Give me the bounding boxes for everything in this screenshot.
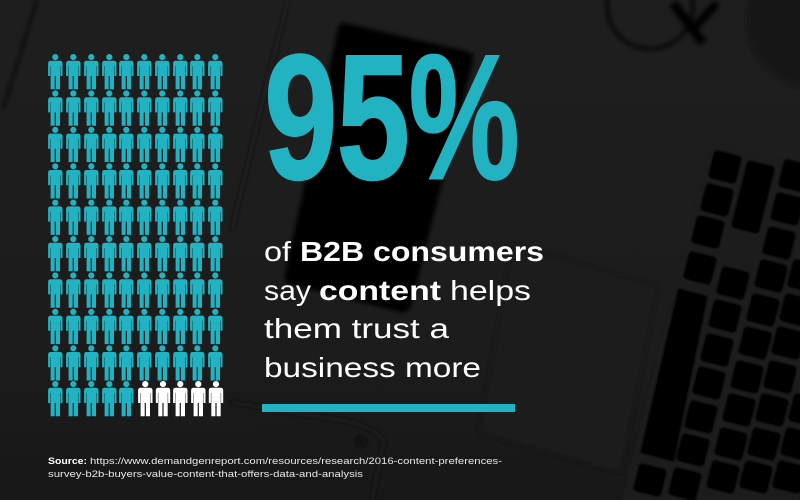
statement text: B2B consumers — [300, 236, 544, 267]
source note: https://www.demandgenreport.com/resources/research/2016-content-preferences- — [90, 456, 502, 467]
statement text — [264, 236, 544, 383]
teal people — [48, 54, 222, 416]
headline statistic — [264, 17, 520, 217]
pictogram: 100 people, 95 highlighted — [48, 54, 223, 416]
source note — [48, 456, 502, 480]
accent bar — [262, 404, 515, 412]
statement text: helps — [450, 275, 531, 306]
white people — [138, 381, 223, 416]
source note: survey-b2b-buyers-value-content-that-offers-data-and-analysis — [48, 469, 363, 480]
statement text: business more — [264, 352, 481, 383]
statement text: say — [264, 275, 311, 306]
statement text: of — [264, 236, 291, 267]
statement text: content — [319, 275, 441, 306]
headline statistic: % — [409, 17, 520, 217]
headline statistic: 95 — [264, 18, 410, 217]
statement text: them trust a — [264, 313, 450, 344]
source note: Source: — [48, 456, 87, 467]
